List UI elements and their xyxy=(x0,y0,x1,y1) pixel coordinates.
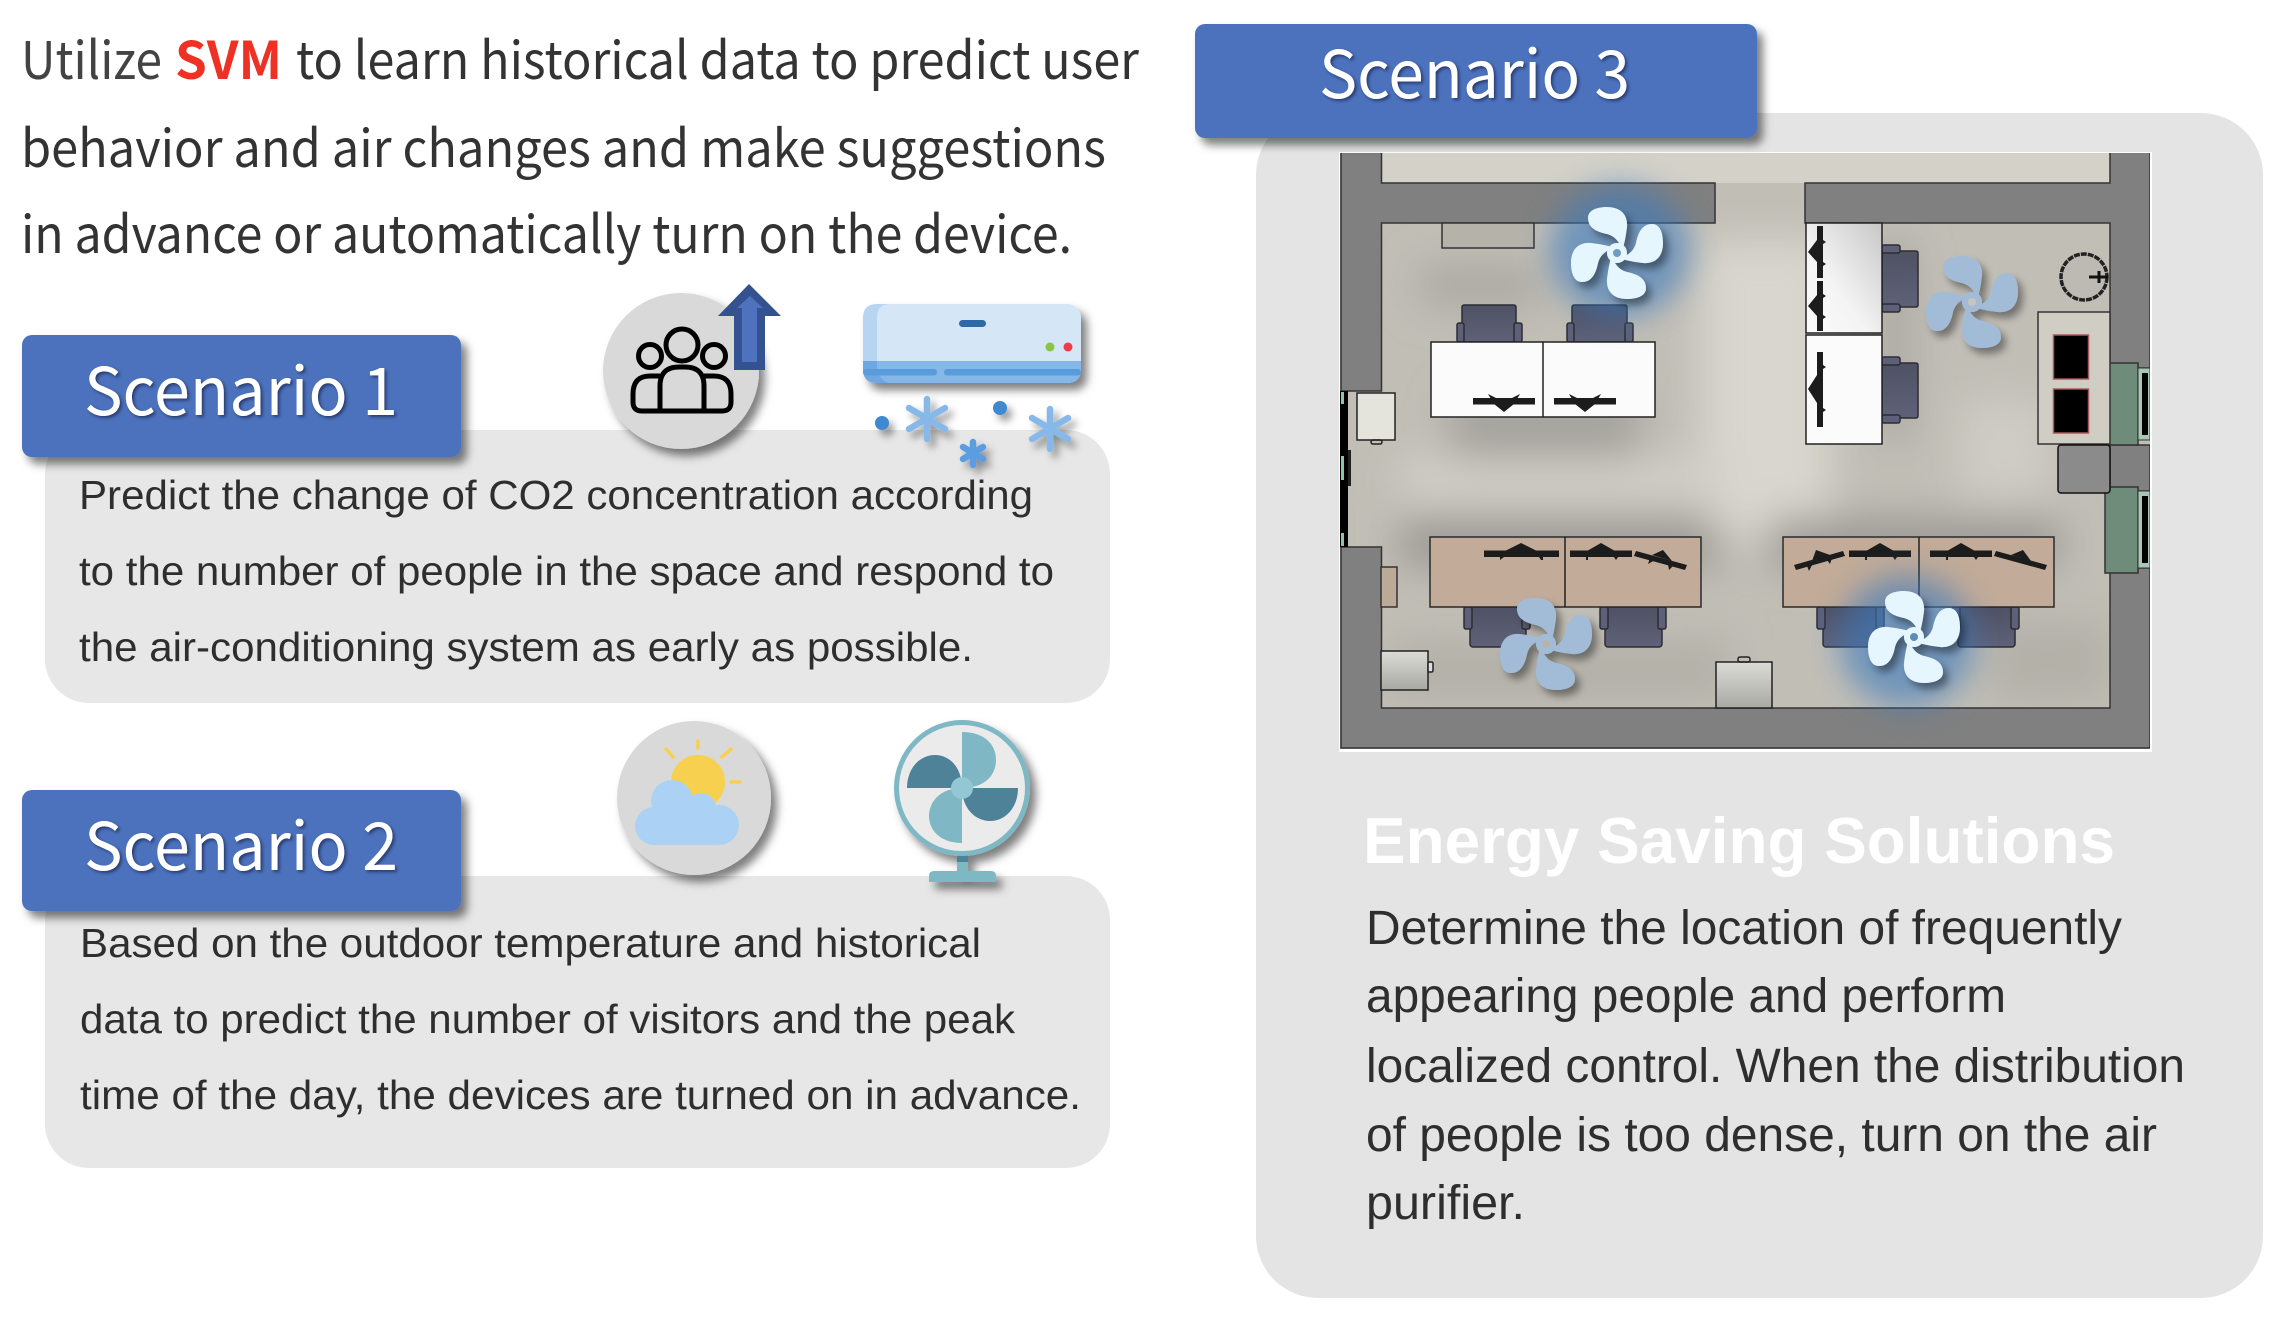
intro paragraph: Utilize xyxy=(21,19,162,94)
text: energy saving description: Determine the location of frequently xyxy=(1366,902,2122,955)
intro paragraph: in advance or automatically turn on the device. xyxy=(21,193,1072,268)
floor surface xyxy=(1340,153,2150,749)
fan: idle top right xyxy=(1926,256,2018,348)
heading: scenario 2 tag xyxy=(22,790,461,911)
air flow glow: top left xyxy=(1550,185,1690,317)
panel: scenario 3 energy saving xyxy=(1256,113,2263,1298)
panel: scenario 2 description: data to predict the number of visitors and the peak xyxy=(80,996,1016,1042)
icon: sun and cloud in gray circle xyxy=(617,721,771,875)
fan: active top left xyxy=(1571,207,1663,299)
icon: upward arrow xyxy=(718,284,781,370)
walls xyxy=(1341,150,2150,748)
icon: people in gray circle xyxy=(603,293,759,449)
panel: scenario 1 description: the air-conditioning system as early as possible. xyxy=(79,624,973,670)
heading: scenario 2 tag: Scenario 2 xyxy=(84,794,398,890)
text: energy saving description: appearing people and perform xyxy=(1366,970,2006,1023)
monitors xyxy=(1473,226,2047,571)
intro paragraph xyxy=(21,19,1140,268)
intro paragraph: to learn historical data to predict user xyxy=(296,19,1140,94)
panel: scenario 2 description: time of the day, the devices are turned on in advance. xyxy=(80,1072,1081,1118)
air flow glow: bottom right xyxy=(1839,575,1975,707)
floor plan xyxy=(1339,150,2152,752)
panel: scenario 1 description: Predict the change of CO2 concentration according xyxy=(79,472,1033,518)
chairs xyxy=(1457,245,2019,647)
heading: scenario 1 tag: Scenario 1 xyxy=(84,339,398,435)
windows and door xyxy=(1340,363,2150,573)
intro paragraph: SVM xyxy=(175,19,282,94)
icon: air conditioner with snow xyxy=(863,304,1081,465)
heading: scenario 3 tag: Scenario 3 xyxy=(1319,22,1630,118)
heading: scenario 3 tag xyxy=(1195,22,1757,138)
heading: energy saving solutions: Energy Saving Solutions xyxy=(1363,804,2115,877)
fan: idle bottom left xyxy=(1500,598,1592,690)
panel: scenario 2 description xyxy=(45,876,1110,1168)
text: energy saving description xyxy=(1366,902,2185,1230)
fan: active bottom right xyxy=(1868,591,1960,683)
text: energy saving description: of people is too dense, turn on the air xyxy=(1366,1109,2157,1162)
icon: electric fan xyxy=(896,722,1028,882)
desks xyxy=(1430,223,2054,607)
furniture: cabinets and boxes xyxy=(1357,223,2110,708)
heading: scenario 1 tag xyxy=(22,335,461,457)
panel: scenario 2 description: Based on the outdoor temperature and historical xyxy=(80,920,981,966)
intro paragraph: behavior and air changes and make suggestions xyxy=(21,107,1106,182)
text: energy saving description: localized control. When the distribution xyxy=(1366,1040,2185,1093)
panel: scenario 1 description: to the number of people in the space and respond to xyxy=(79,548,1054,594)
text: energy saving description: purifier. xyxy=(1366,1177,1525,1230)
panel: scenario 1 description xyxy=(45,430,1110,703)
